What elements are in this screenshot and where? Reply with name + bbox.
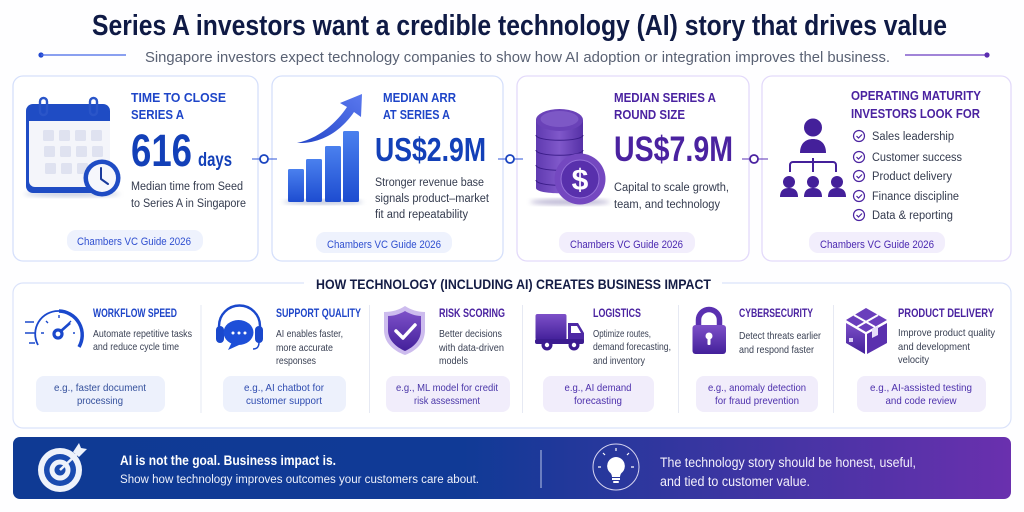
heading: round size: ROUND SIZE	[614, 107, 685, 122]
stat: US$7.9M: US$7.9M	[614, 130, 733, 169]
source pill: Chambers VC Guide 2026	[77, 236, 191, 248]
heading: median ARR: AT SERIES A	[383, 107, 451, 122]
item: product delivery	[846, 308, 996, 412]
panel: operating maturity	[762, 76, 1011, 261]
icon: org chart	[780, 118, 846, 197]
subtitle: Singapore investors expect technology companies to show how AI adoption or integration improves thel business.	[145, 49, 890, 66]
description	[438, 328, 504, 367]
stat: 616 days: days	[198, 150, 232, 171]
example pill: e.g., faster document	[54, 382, 146, 394]
source pill	[316, 232, 452, 253]
description: more accurate	[276, 342, 333, 354]
example pill: for fraud prevention	[715, 395, 799, 407]
icon: coin stack: $	[572, 164, 589, 197]
description: and development	[898, 341, 970, 353]
example pill	[36, 376, 165, 412]
callout: business impact: AI is not the goal. Business impact is.	[120, 452, 336, 468]
description: signals product–market	[375, 193, 490, 205]
description: Capital to scale growth,	[614, 182, 729, 194]
description: Better decisions	[439, 328, 502, 340]
checklist: Finance discipline	[872, 191, 959, 203]
example pill	[696, 376, 818, 412]
icon: package box	[846, 308, 887, 354]
description: models	[439, 355, 468, 367]
panel: technology impact	[13, 276, 1011, 428]
item: support quality	[216, 305, 361, 412]
example pill	[223, 376, 346, 412]
heading: operating maturity: INVESTORS LOOK FOR	[851, 106, 981, 121]
icon: delivery truck	[535, 314, 584, 350]
description: demand forecasting,	[593, 341, 671, 353]
description: and inventory	[593, 355, 646, 367]
panel: time to close	[13, 76, 258, 261]
example pill: risk assessment	[414, 395, 480, 407]
description: Stronger revenue base	[375, 177, 484, 189]
example pill: e.g., AI-assisted testing	[870, 382, 972, 394]
source pill: Chambers VC Guide 2026	[327, 239, 441, 251]
description: Automate repetitive tasks	[93, 328, 192, 340]
example pill: e.g., AI chatbot for	[244, 382, 324, 394]
icon: speedometer	[25, 311, 82, 347]
description	[276, 328, 343, 367]
heading: SUPPORT QUALITY	[276, 308, 361, 320]
heading: round size	[614, 90, 717, 122]
example pill: and code review	[886, 395, 957, 407]
heading: RISK SCORING	[439, 308, 505, 320]
panel: median ARR	[272, 76, 503, 261]
item: risk scoring	[384, 306, 510, 412]
section heading: HOW TECHNOLOGY (INCLUDING AI) CREATES BUSINESS IMPACT	[316, 276, 711, 292]
panel: round size	[517, 76, 749, 261]
icon: light bulb	[593, 444, 639, 490]
example pill	[543, 376, 654, 412]
connector: card 3 to card 4	[742, 155, 768, 163]
description: responses	[276, 355, 316, 367]
description: Optimize routes,	[593, 328, 651, 340]
heading: operating maturity: OPERATING MATURITY	[851, 88, 981, 103]
description: with data-driven	[438, 342, 504, 354]
checklist: Product delivery	[872, 171, 952, 183]
right subtitle rule	[905, 52, 990, 58]
example pill: e.g., anomaly detection	[708, 382, 806, 394]
heading: LOGISTICS	[593, 308, 641, 320]
example pill	[386, 376, 510, 412]
description	[739, 330, 821, 356]
callout: technology story: The technology story should be honest, useful,	[660, 455, 916, 470]
example pill: processing	[77, 395, 123, 407]
heading: round size: MEDIAN SERIES A	[614, 90, 717, 105]
checklist	[854, 130, 962, 222]
callout: business impact: Show how technology improves outcomes your customers care about.	[120, 474, 479, 486]
icon: padlock	[692, 310, 726, 354]
heading: CYBERSECURITY	[739, 308, 813, 320]
heading: time to close: TIME TO CLOSE	[131, 90, 226, 105]
description	[593, 328, 671, 367]
description	[375, 177, 490, 221]
example pill	[857, 376, 986, 412]
heading: time to close	[131, 90, 226, 122]
item: workflow speed	[25, 308, 192, 412]
description: fit and repeatability	[375, 209, 468, 221]
icon: coin stack	[530, 109, 610, 205]
description: to Series A in Singapore	[131, 198, 246, 210]
connector: card 2 to card 3	[498, 155, 523, 163]
source pill	[559, 232, 695, 253]
connector: card 1 to card 2	[252, 155, 277, 163]
source pill	[67, 230, 203, 251]
checklist: Sales leadership	[872, 131, 954, 143]
icon: bar chart with arrow	[283, 94, 363, 204]
heading: median ARR	[383, 90, 457, 122]
item: cybersecurity	[692, 308, 821, 412]
description	[898, 327, 996, 366]
callout: technology story: and tied to customer value.	[660, 474, 810, 489]
description: and reduce cycle time	[93, 341, 179, 353]
example pill: customer support	[246, 395, 322, 407]
description: AI enables faster,	[276, 328, 343, 340]
description	[614, 182, 729, 211]
stat: 616 days: 616	[131, 125, 192, 176]
description: velocity	[898, 354, 930, 366]
heading: WORKFLOW SPEED	[93, 308, 177, 320]
description	[93, 328, 192, 353]
heading: median ARR: MEDIAN ARR	[383, 90, 457, 105]
checklist: Customer success	[872, 152, 962, 164]
example pill: forecasting	[574, 395, 622, 407]
description: and respond faster	[739, 344, 814, 356]
source pill	[809, 232, 945, 253]
left subtitle rule	[38, 52, 126, 58]
item: logistics	[535, 308, 671, 412]
description: Median time from Seed	[131, 181, 243, 193]
description	[131, 181, 246, 210]
description: Detect threats earlier	[739, 330, 821, 342]
example pill: e.g., ML model for credit	[396, 382, 498, 394]
icon: shield check	[384, 306, 425, 355]
banner	[13, 437, 1011, 499]
heading: PRODUCT DELIVERY	[898, 308, 994, 320]
checklist: Data & reporting	[872, 210, 953, 222]
callout: business impact	[120, 452, 479, 486]
callout: technology story	[660, 455, 916, 489]
source pill: Chambers VC Guide 2026	[570, 239, 683, 251]
stat: US$2.9M: US$2.9M	[375, 131, 486, 168]
source pill: Chambers VC Guide 2026	[820, 239, 934, 251]
icon: calendar	[24, 98, 120, 197]
icon: target with arrow	[38, 443, 87, 492]
heading: time to close: SERIES A	[131, 107, 185, 122]
heading: operating maturity	[851, 88, 981, 121]
description: team, and technology	[614, 199, 720, 211]
icon: headset chat	[216, 305, 263, 350]
example pill: e.g., AI demand	[564, 382, 632, 394]
description: Improve product quality	[898, 327, 996, 339]
